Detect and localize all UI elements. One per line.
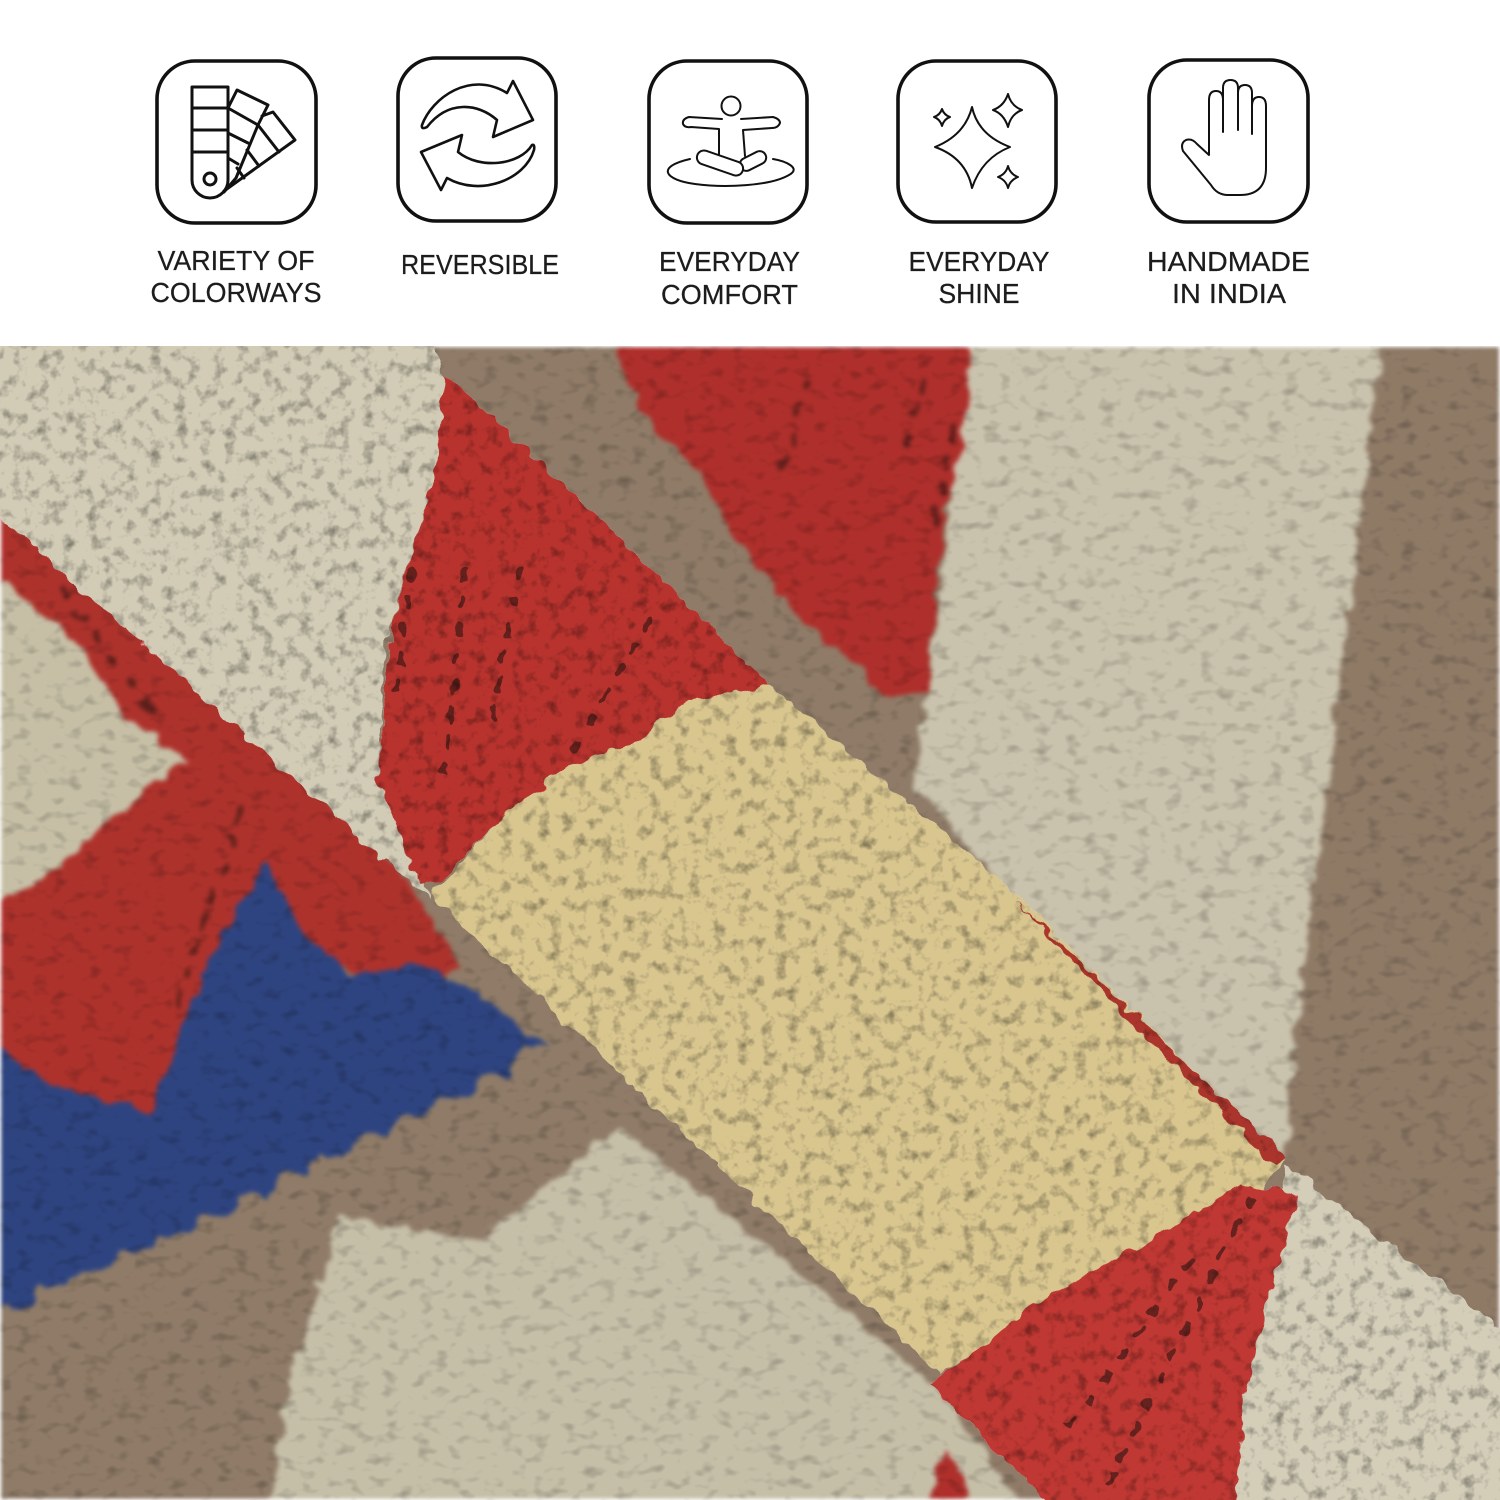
lower beige panel <box>265 1125 1040 1500</box>
label: variety of colorways: VARIETY OF <box>158 245 314 276</box>
icon: open hand <box>1149 60 1308 222</box>
red chevron left <box>0 470 460 1110</box>
dark flecks on red roll section <box>395 570 650 770</box>
feature: everyday shine <box>898 61 1056 309</box>
off-white roll section bottom right <box>1235 1165 1500 1500</box>
feature: variety of colorways <box>150 61 322 308</box>
lower red roll section <box>930 1185 1300 1500</box>
label line two: in india: IN INDIA <box>1172 278 1287 309</box>
red motif top <box>600 320 968 695</box>
dark weave flecks in red motif <box>780 380 955 530</box>
icon: reversing arrows <box>398 58 556 221</box>
label: everyday: EVERYDAY <box>659 246 800 277</box>
beige diamond left <box>0 560 185 920</box>
blue chevron <box>0 860 550 1310</box>
feature: everyday comfort <box>649 61 807 310</box>
feature: handmade in india <box>1147 60 1310 309</box>
label line two: shine: SHINE <box>938 278 1020 309</box>
red roll section <box>378 372 770 885</box>
rug background: out of focus pattern <box>0 320 1500 1500</box>
icon: meditating figure <box>649 61 807 223</box>
brown base weave <box>0 346 1330 1500</box>
icon: sparkles <box>898 61 1056 222</box>
label: everyday: EVERYDAY <box>908 246 1050 277</box>
beige vertical stripe <box>915 320 1385 1160</box>
thin red sliver on roll top edge <box>1015 900 1285 1165</box>
label: reversible: REVERSIBLE <box>401 249 559 280</box>
dark flecks on lower red section <box>1060 1200 1250 1480</box>
cream roll section <box>430 685 1285 1375</box>
label line two: comfort: COMFORT <box>661 279 798 310</box>
off-white roll section top left <box>0 320 452 900</box>
label: handmade: HANDMADE <box>1147 246 1310 277</box>
white header background <box>0 0 1500 346</box>
small red fragment bottom <box>930 1445 965 1500</box>
feature: reversible <box>398 58 559 280</box>
brown right stripe <box>1285 320 1500 1400</box>
label line two: colorways: COLORWAYS <box>150 277 322 308</box>
rolled edge of the rug in focus <box>0 320 1500 1500</box>
icon: colour swatch fan <box>157 61 316 223</box>
dark weave flecks in left red <box>60 590 240 1010</box>
photo: rolled woven rug close-up <box>0 320 1500 1500</box>
